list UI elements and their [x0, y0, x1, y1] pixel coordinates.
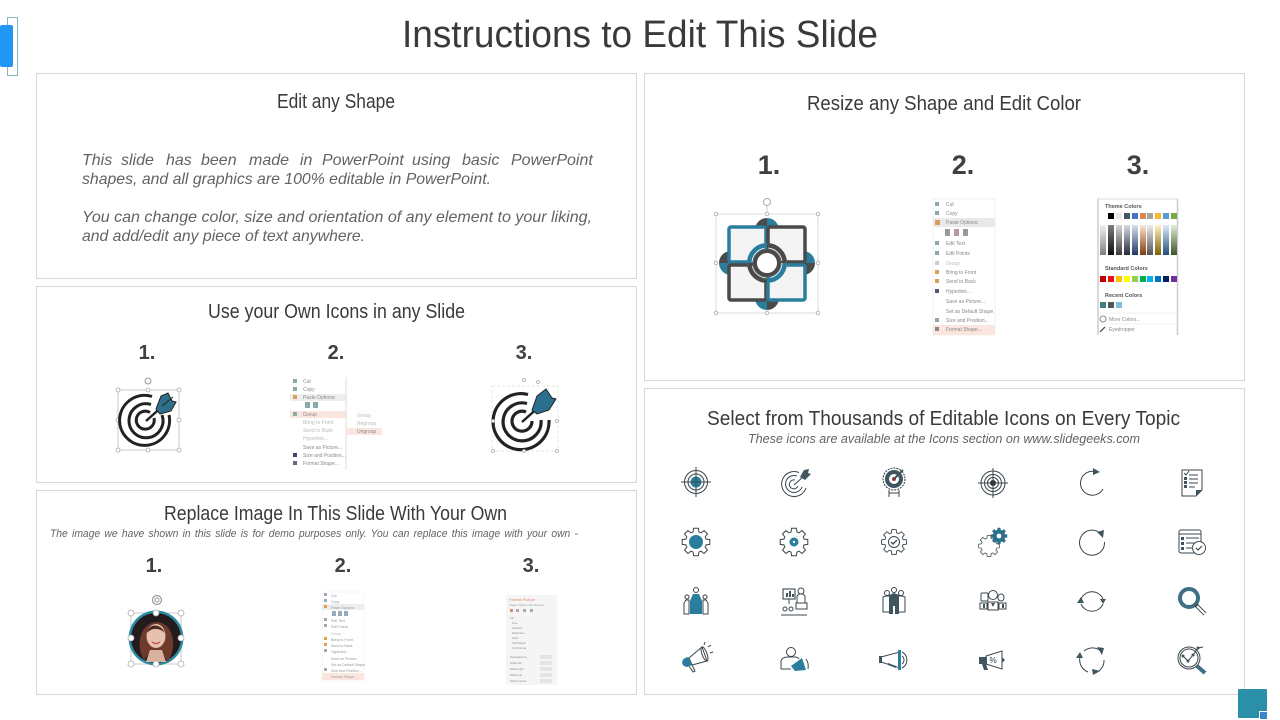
format picture pane: Offset left — [510, 661, 522, 665]
step numbers: 1. — [146, 555, 162, 577]
icon: magnifier — [1180, 589, 1205, 614]
heading: replace image: Replace Image In This Slide With Your Own — [164, 503, 507, 525]
icon: selected target — [116, 378, 181, 452]
text block: editing instructions: You can change color, size and orientation of any element to your liking, — [82, 209, 592, 226]
icon: checklist document — [1182, 470, 1202, 496]
context menu: format shape: Format Shape... — [946, 327, 982, 333]
context menu: group and ungroup: Size and Position... — [303, 453, 346, 459]
panel: use your own icons — [36, 286, 636, 482]
context menu: format shape: Save as Picture... — [946, 299, 985, 305]
context menu: change picture: Edit Text — [331, 619, 345, 623]
context menu: format shape: Bring to Front — [946, 270, 977, 276]
icon: target on stand — [883, 468, 905, 497]
color palette menu: Theme Colors — [1105, 204, 1142, 210]
panel: editable icons — [644, 388, 1244, 694]
context menu: group and ungroup: Paste Options: — [303, 395, 336, 401]
text block: editing instructions: basic — [462, 152, 499, 169]
icon: crosshair target — [681, 467, 711, 497]
step numbers: 1. — [139, 342, 155, 364]
icon: discount megaphone — [979, 651, 1005, 670]
format picture pane: Offset bottom — [510, 679, 527, 683]
context menu: format shape: Copy — [946, 211, 958, 217]
step numbers — [758, 150, 1149, 180]
step numbers — [139, 342, 532, 364]
subtitle: icons section: These icons are available at the Icons section on www.slidegeeks.com — [748, 431, 1140, 446]
icon: megaphone — [682, 642, 713, 672]
icon: gear target — [780, 528, 808, 556]
heading: resize any shape: Resize any Shape and Edit Color — [807, 93, 1081, 115]
icon: business team — [883, 588, 905, 614]
heading: use your own icons: Use your Own Icons in any Slide — [208, 301, 465, 323]
decorative square: bottom right — [1238, 689, 1268, 720]
context menu: group and ungroup: Group — [357, 413, 371, 419]
context menu: format shape — [933, 199, 995, 335]
format picture pane: Shadow — [512, 626, 523, 630]
format picture pane: Reflection — [512, 631, 525, 635]
text block: editing instructions: shapes, and all graphics are 100% editable in PowerPoint. — [82, 171, 491, 188]
format picture pane: Soft Edges — [512, 641, 526, 645]
icon: sync arrows — [1077, 592, 1106, 611]
step numbers: 3. — [523, 555, 539, 577]
context menu: change picture: Hyperlink... — [331, 650, 349, 654]
context menu: group and ungroup: Send to Back — [303, 428, 333, 434]
text block: editing instructions: using — [412, 152, 450, 169]
text block: editing instructions: PowerPoint — [322, 152, 404, 169]
text block: editing instructions: slide — [121, 152, 154, 169]
context menu: format shape: Edit Text — [946, 241, 966, 247]
color palette menu: More Colors... — [1109, 317, 1140, 323]
text block: editing instructions: and add/edit any piece of text anywhere. — [82, 228, 365, 245]
icon: dart target — [782, 469, 811, 497]
icon: double gears — [979, 528, 1007, 556]
context menu: group and ungroup: Ungroup — [357, 429, 376, 435]
context menu: group and ungroup: Regroup — [357, 421, 376, 427]
icon: discount megaphone: % — [989, 656, 997, 665]
step numbers: 2. — [328, 342, 344, 364]
text block: editing instructions: in — [300, 152, 313, 169]
panel: replace image — [36, 490, 636, 694]
context menu: group and ungroup: Cut — [303, 379, 311, 385]
text block: editing instructions — [82, 152, 593, 245]
context menu: format shape: Set as Default Shape — [946, 309, 993, 315]
step numbers — [146, 555, 539, 577]
text block: editing instructions: This — [82, 152, 112, 169]
step numbers: 2. — [335, 555, 351, 577]
context menu: format shape: Edit Points — [946, 251, 970, 257]
icon: team faces — [980, 590, 1006, 610]
text block: editing instructions: has — [166, 152, 192, 169]
color palette menu: Standard Colors — [1105, 266, 1148, 272]
icon: meeting people — [684, 588, 708, 614]
format picture pane: Glow — [512, 636, 519, 640]
context menu: change picture — [322, 592, 365, 681]
text block: editing instructions: made — [249, 152, 289, 169]
heading: editable icons: Select from Thousands of Editable Icons on Every Topic — [707, 408, 1180, 430]
icon: gear solid center — [682, 528, 710, 556]
context menu: change picture: Copy — [331, 600, 340, 604]
context menu: change picture: Edit Points — [331, 625, 348, 629]
step numbers: 3. — [516, 342, 532, 364]
context menu: format shape: Cut — [946, 202, 954, 208]
context menu: group and ungroup: Hyperlink... — [303, 436, 328, 442]
context menu: format shape: Size and Position... — [946, 318, 989, 324]
icon: target with edit points — [492, 378, 558, 452]
format picture pane: Offset right — [510, 667, 524, 671]
color palette menu: Eyedropper — [1109, 327, 1135, 333]
context menu: group and ungroup — [290, 377, 382, 470]
icon: three arrows cycle — [1076, 647, 1104, 675]
text block: editing instructions: been — [201, 152, 237, 169]
step numbers: 1. — [758, 150, 780, 180]
icon: window checklist — [1179, 530, 1206, 554]
photo: portrait in circle with handles — [128, 596, 184, 667]
context menu: group and ungroup: Bring to Front — [303, 420, 334, 426]
heading: edit any shape: Edit any Shape — [277, 91, 395, 113]
format picture pane: Shape Options Text Options — [509, 603, 544, 607]
diagram: four-square shape with selection — [714, 198, 820, 315]
color palette menu — [1097, 199, 1179, 335]
context menu: change picture: Cut — [331, 594, 337, 598]
title: Instructions to Edit This Slide — [402, 14, 878, 56]
format picture pane: Fill — [510, 616, 514, 620]
icon: megaphone right — [879, 650, 907, 670]
context menu: format shape: Send to Back — [946, 279, 976, 285]
context menu: format shape: Paste Options: — [946, 220, 979, 226]
format picture pane: Offset top — [510, 673, 523, 677]
icon: magnifier chart — [1178, 646, 1205, 673]
icon: presentation audience — [781, 588, 807, 615]
context menu: group and ungroup: Save as Picture... — [303, 445, 342, 451]
context menu: group and ungroup: Group — [303, 412, 317, 418]
context menu: change picture: Size and Position... — [331, 669, 362, 673]
context menu: change picture: Set as Default Shape — [331, 663, 365, 667]
decorative tab: top left — [0, 18, 18, 76]
format picture pane: Transparency — [510, 655, 528, 659]
step numbers: 2. — [952, 150, 974, 180]
format picture pane: Format Picture — [509, 597, 536, 602]
context menu: change picture: Save as Picture... — [331, 657, 359, 661]
subtitle: replace image: The image we have shown in this slide is for demo purposes only. You can replace this image with your own - — [50, 528, 578, 540]
icon: circular arrow — [1080, 530, 1105, 555]
context menu: format shape: Hyperlink... — [946, 289, 971, 295]
context menu: group and ungroup: Copy — [303, 387, 315, 393]
icon: clockwise arrow — [1080, 468, 1103, 495]
panel: resize any shape — [644, 74, 1244, 380]
format picture pane — [506, 595, 557, 685]
icon: crosshair rings — [978, 468, 1008, 498]
icon: gear check — [882, 530, 906, 554]
color palette menu: Recent Colors — [1105, 293, 1142, 299]
step numbers: 3. — [1127, 150, 1149, 180]
context menu: change picture: Group — [331, 632, 341, 636]
context menu: change picture: Send to Back — [331, 644, 353, 648]
panel: edit any shape — [36, 74, 636, 278]
context menu: change picture: Bring to Front — [331, 638, 353, 642]
format picture pane: 3-D Format — [512, 646, 526, 650]
context menu: change picture: Paste Options: — [331, 606, 355, 610]
icon: person with megaphone — [781, 648, 808, 671]
format picture pane: Line — [512, 621, 518, 625]
context menu: format shape: Group — [946, 261, 960, 267]
context menu: change picture: Format Shape... — [331, 675, 357, 679]
context menu: group and ungroup: Format Shape... — [303, 461, 339, 467]
text block: editing instructions: PowerPoint — [511, 152, 593, 169]
